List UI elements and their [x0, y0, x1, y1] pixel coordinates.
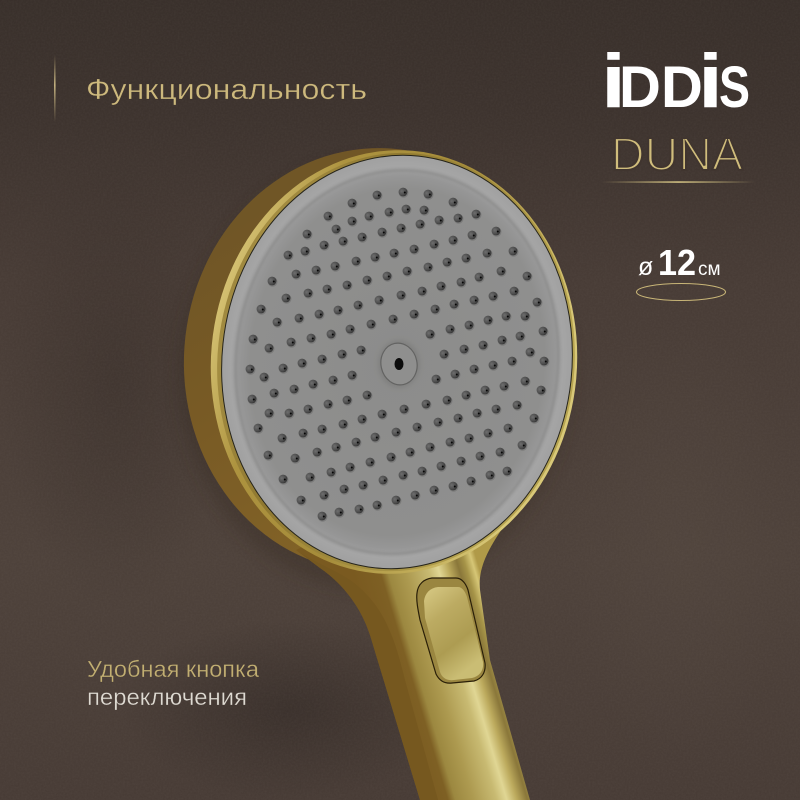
accent line	[54, 55, 56, 122]
grey spray face	[201, 138, 593, 586]
logo: i	[601, 39, 626, 124]
switch button	[417, 578, 485, 683]
logo: i	[698, 39, 723, 124]
logo	[601, 39, 750, 124]
logo: D	[619, 55, 661, 120]
button caption	[87, 656, 259, 710]
logo: S	[719, 55, 750, 120]
diameter label: см	[698, 259, 721, 280]
handle shaded side	[296, 550, 438, 800]
diameter label: 12	[658, 242, 696, 283]
model underline	[602, 181, 755, 183]
back of shower head	[170, 135, 582, 585]
centre hub	[377, 340, 421, 388]
gold rim	[193, 135, 595, 589]
nozzles	[246, 188, 550, 522]
face bevel ridge	[217, 154, 577, 570]
diameter label	[638, 242, 721, 283]
button caption: Удобная кнопка	[87, 656, 259, 682]
model name: DUNA	[611, 128, 743, 180]
diameter label: ø	[638, 253, 653, 281]
shower head and handle	[170, 135, 595, 800]
rim inner band	[197, 135, 595, 589]
handle body	[296, 500, 530, 800]
logo: D	[661, 55, 703, 120]
button caption: переключения	[87, 684, 247, 710]
shower head shadow	[179, 159, 571, 591]
diameter ellipse	[636, 284, 726, 300]
title: Функциональность	[86, 74, 367, 106]
